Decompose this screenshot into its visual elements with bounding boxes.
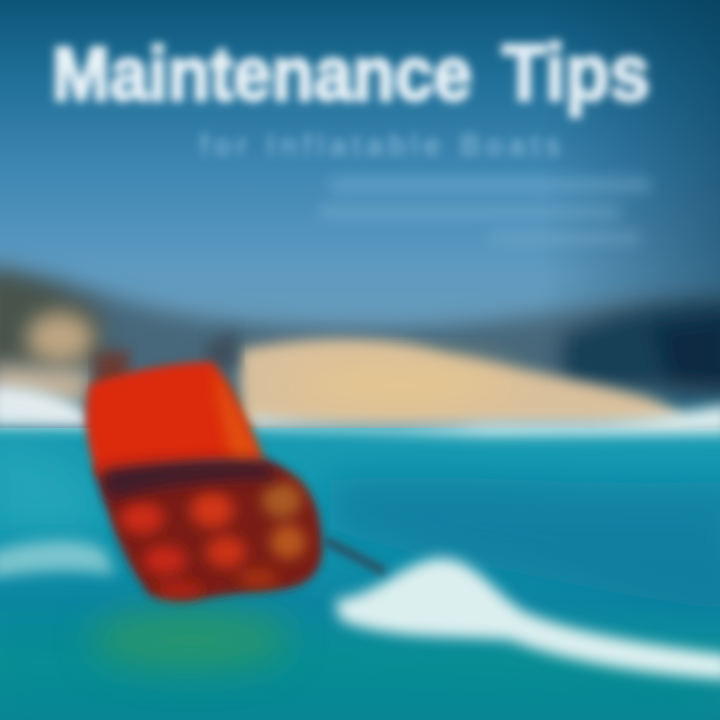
orange edge on panel [215,370,262,460]
title: Maintenance Tips: Maintenance [52,32,472,117]
lower net section [95,460,322,599]
tether [325,540,385,572]
green water below the boat [90,610,290,670]
red bag with dark netting [86,330,385,599]
sandy dunes [0,312,690,425]
title: Maintenance Tips: Tips [502,28,650,117]
sea [0,428,720,720]
left shoulder [95,350,130,395]
sky background [0,0,720,345]
foreground wave foam [0,541,720,680]
shoreline surf [0,385,720,436]
red upper panel [86,362,262,478]
distant hills [0,265,720,400]
mid-sea shading [0,440,720,720]
net highlights [120,482,306,598]
subtitle: for Inflatable Boats [200,129,560,162]
dark net band [100,460,280,500]
faint body text [320,178,650,244]
strap above the bag [205,330,238,372]
